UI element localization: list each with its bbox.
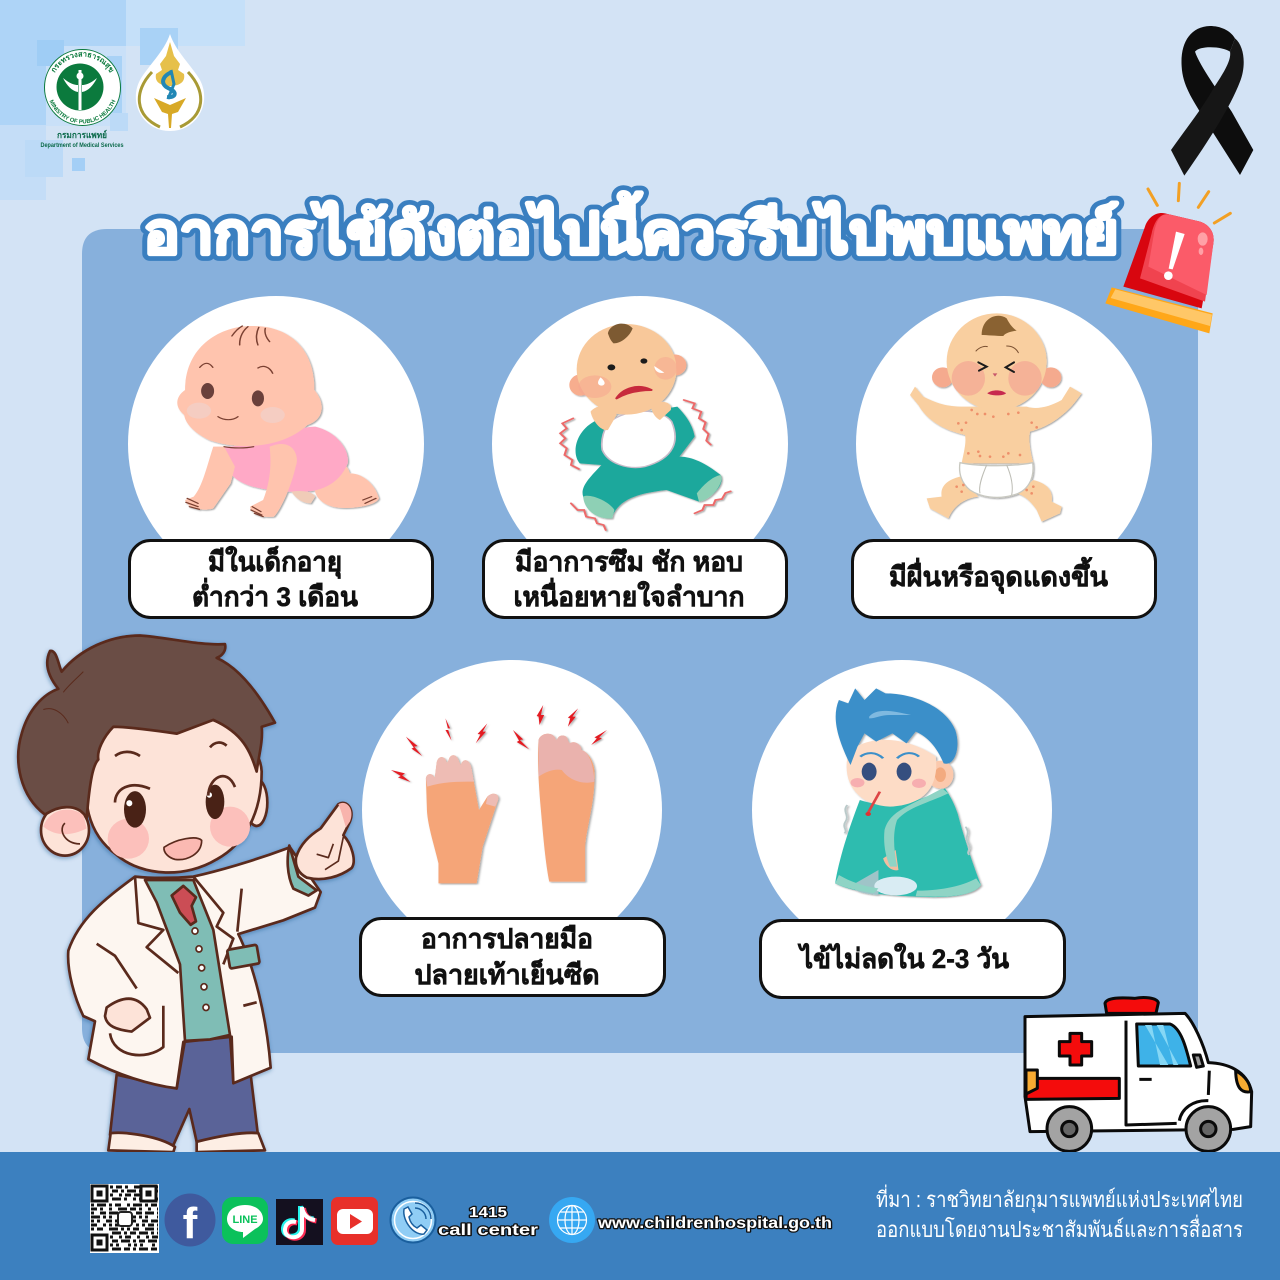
circle background <box>128 296 424 592</box>
circle background <box>856 296 1152 592</box>
illustration: baby with rash <box>910 313 1082 522</box>
icon: red alarm siren <box>1105 183 1230 333</box>
title: อาการไข้ดังต่อไปนี้ควรรีบไปพบแพทย์ <box>144 192 1118 266</box>
logo: department emblem drop <box>136 34 204 131</box>
illustration: feverish boy in blanket <box>835 688 981 897</box>
website text: www.childrenhospital.go.th <box>597 1215 832 1232</box>
source credits <box>876 1184 1243 1242</box>
label box <box>760 920 1064 998</box>
title: อาการไข้ดังต่อไปนี้ควรรีบไปพบแพทย์ <box>144 192 1118 266</box>
label text: อาการปลายมือ <box>421 924 593 954</box>
icon: black mourning ribbon <box>1171 26 1253 176</box>
icon: phone call center <box>390 1198 436 1242</box>
label text: มีผื่นหรือจุดแดงขึ้น <box>889 556 1109 594</box>
footer bar <box>0 1152 1280 1280</box>
icon: youtube <box>331 1197 378 1245</box>
logo: ministry of public health <box>44 49 121 126</box>
logo: ministry of public health: MINISTRY OF PUBLIC HEALTH <box>50 100 116 124</box>
call center text <box>438 1204 538 1239</box>
panel: symptom 5 fever not subsiding <box>752 660 1064 998</box>
call center text: call center <box>438 1222 538 1239</box>
label text: มีอาการซึม ชัก หอบ <box>515 547 743 577</box>
blue content panel <box>82 229 1198 1053</box>
call center text: 1415 <box>469 1204 507 1221</box>
illustration: cold hand and foot <box>391 705 607 883</box>
panel: symptom 2 drowsy seizure breathless <box>484 296 788 618</box>
circle background <box>752 660 1052 960</box>
label box <box>360 918 664 996</box>
illustration: crying shaking baby <box>560 324 731 530</box>
label box <box>852 540 1156 618</box>
illustration: doctor pointing <box>18 635 354 1152</box>
logo caption: Department of Medical Services <box>40 143 124 149</box>
label text: ไข้ไม่ลดใน 2-3 วัน <box>797 943 1010 974</box>
decorative squares top-left <box>0 0 245 200</box>
panel: symptom 3 rash <box>852 296 1156 618</box>
logo: ministry of public health: กระทรวงสาธารณสุข <box>52 52 114 73</box>
qr code <box>90 1184 159 1253</box>
label text: เหนื่อยหายใจลำบาก <box>514 577 744 612</box>
circle background <box>492 296 788 592</box>
icon: tiktok <box>276 1199 323 1245</box>
icon: line: LINE <box>232 1214 258 1226</box>
logo caption: กรมการแพทย์ <box>57 129 107 140</box>
panel: symptom 4 cold hands and feet <box>360 660 664 996</box>
label box <box>484 540 786 618</box>
icon: globe website <box>549 1197 595 1243</box>
label text: ต่ำกว่า 3 เดือน <box>192 577 359 612</box>
panel: symptom 1 infant under 3 months <box>128 296 432 618</box>
label text: ปลายเท้าเย็นซีด <box>414 957 600 990</box>
icon: facebook: f <box>183 1199 198 1248</box>
label text: มีในเด็กอายุ <box>208 544 342 579</box>
label box <box>130 540 432 618</box>
circle background <box>362 660 662 960</box>
illustration: ambulance <box>1025 998 1252 1151</box>
logo caption <box>40 129 124 149</box>
illustration: crawling baby <box>177 326 379 517</box>
icon: line <box>222 1197 268 1244</box>
icon: facebook <box>164 1194 216 1248</box>
